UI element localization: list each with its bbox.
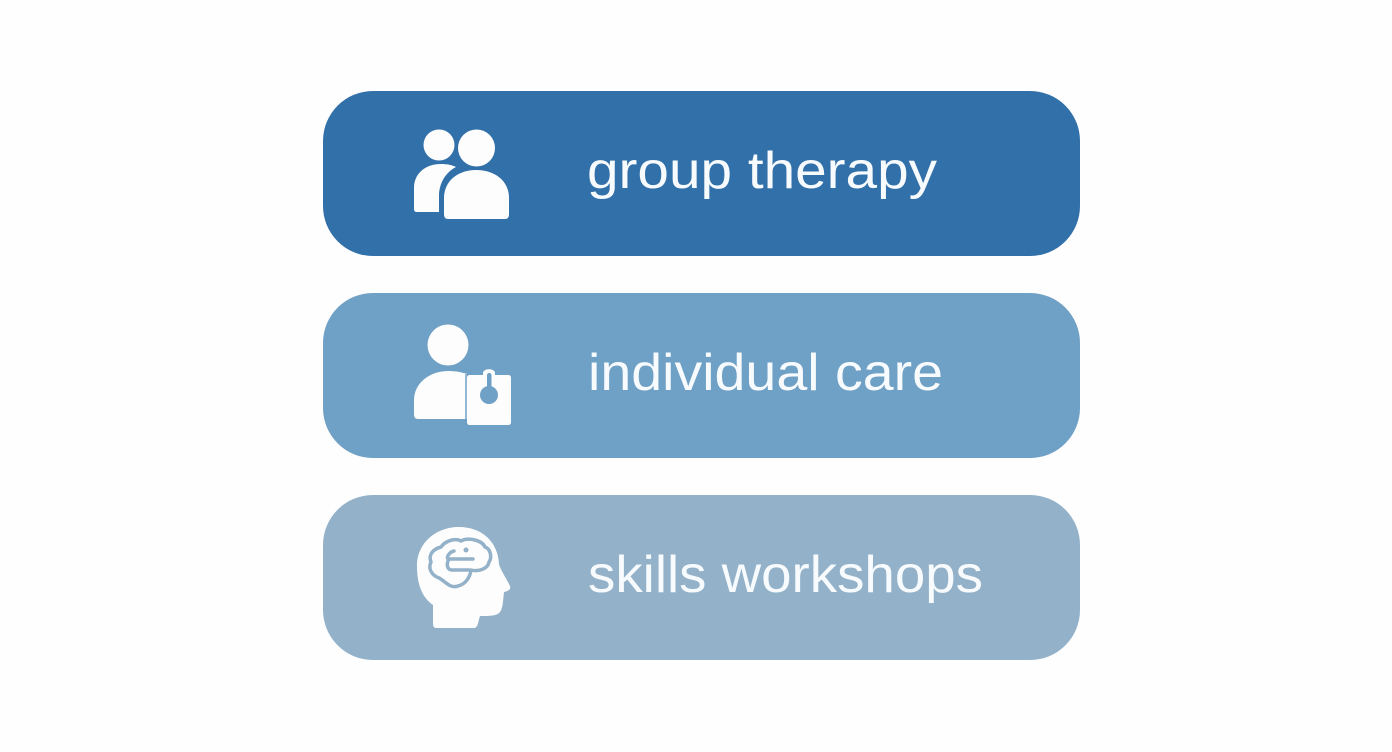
panel: group therapy [323,91,1080,256]
label: skills workshops: skills workshops [588,546,983,604]
label: group therapy: group therapy [587,142,937,200]
panel: individual care [323,293,1080,458]
icon: head with brain [417,527,510,628]
label: individual care: individual care [588,344,943,402]
icon: person with clipboard [414,324,511,426]
brain outline [430,539,491,587]
icon: two people [414,130,509,219]
panel: skills workshops [323,495,1080,660]
